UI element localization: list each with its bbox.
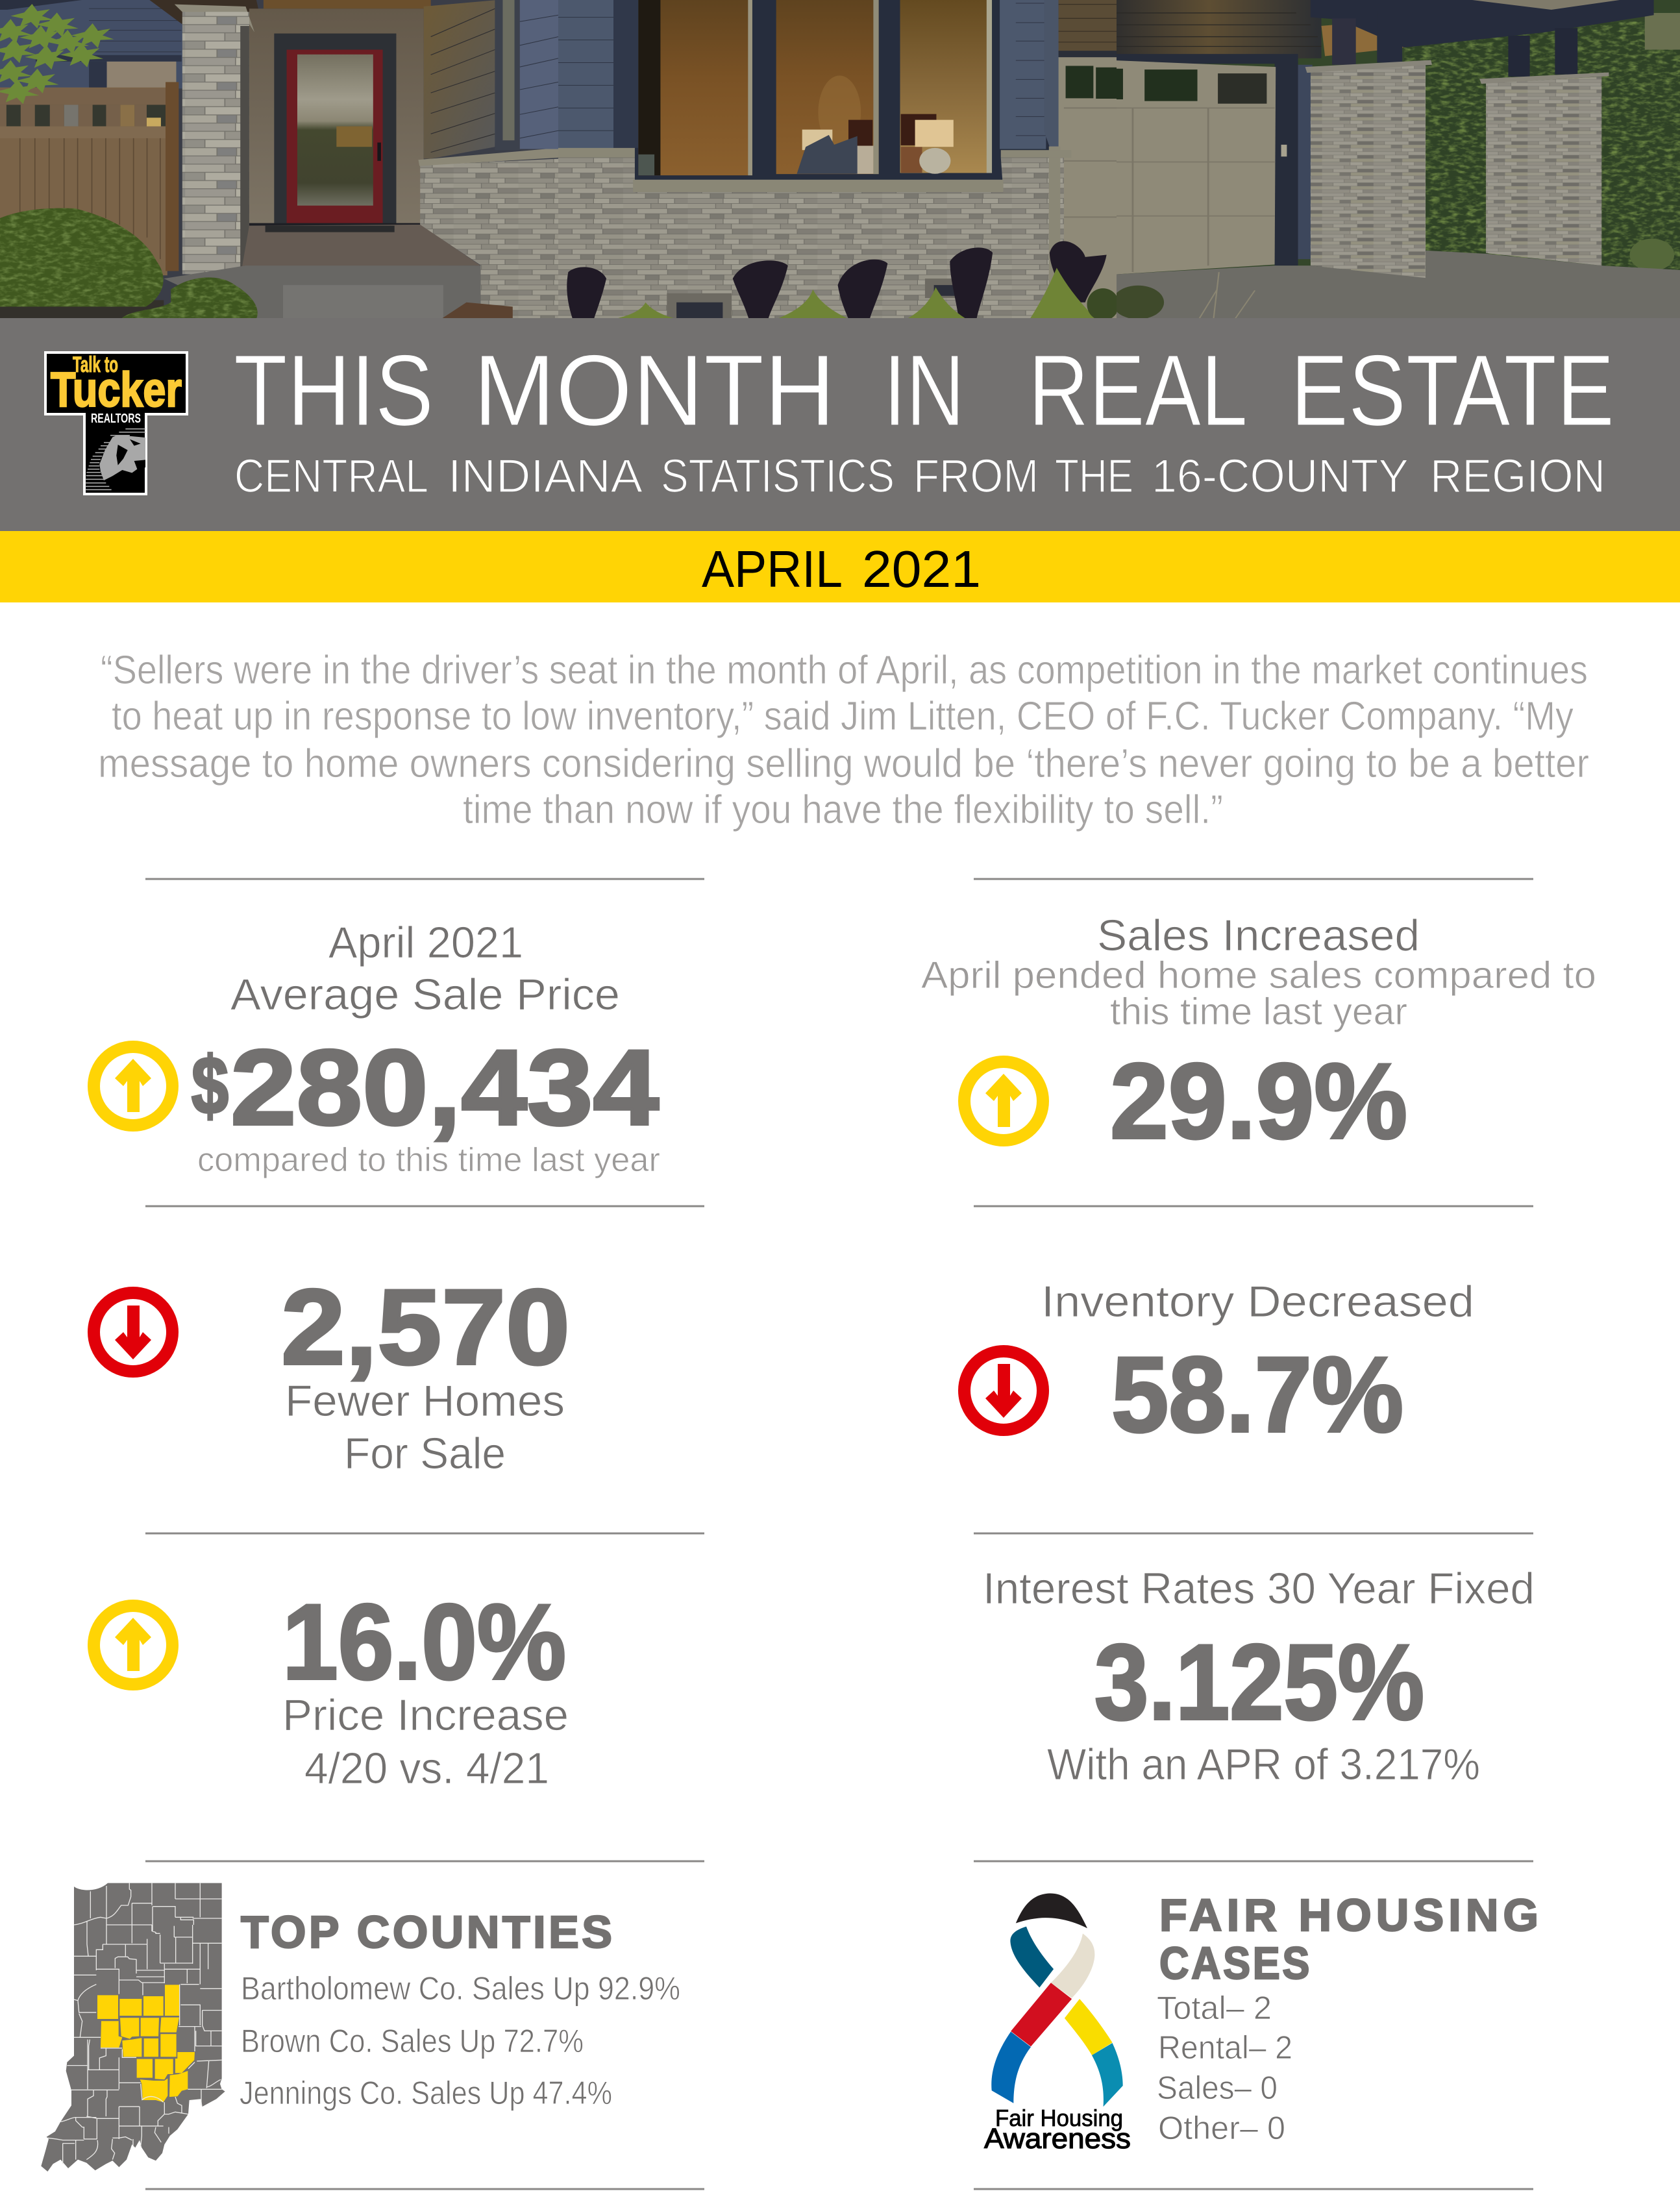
panel: fair housing cases: FAIR HOUSING bbox=[1159, 1890, 1538, 1940]
date banner: APRIL bbox=[702, 540, 843, 598]
header band bbox=[0, 318, 1680, 531]
panel: fewer homes: For Sale bbox=[344, 1429, 506, 1478]
panel: sales increased: April pended home sales compared to bbox=[921, 954, 1596, 996]
panel: average sale price: compared to this time last year bbox=[197, 1141, 660, 1179]
price value: $ bbox=[191, 1041, 229, 1131]
title: MONTH bbox=[473, 334, 835, 447]
title bbox=[234, 334, 1614, 447]
panel: sales increased: Sales Increased bbox=[1097, 911, 1420, 960]
panel: fair housing cases: Fair Housing bbox=[995, 2105, 1123, 2131]
title: THIS bbox=[234, 334, 434, 447]
panel: inventory decreased: Inventory Decreased bbox=[1041, 1277, 1474, 1326]
icon: up arrow bbox=[93, 1606, 173, 1684]
panel: fair housing cases: Sales– 0 bbox=[1157, 2070, 1278, 2106]
panel: interest rates bbox=[983, 1564, 1535, 1789]
panel: price increase: 16.0% bbox=[282, 1582, 566, 1702]
icon: down arrow bbox=[93, 1293, 173, 1371]
panel: interest rates: Interest Rates 30 Year Fixed bbox=[983, 1564, 1535, 1613]
panel: price increase: Price Increase bbox=[282, 1690, 569, 1740]
panel: inventory decreased: 58.7% bbox=[1111, 1335, 1403, 1454]
panel: average sale price: April 2021 bbox=[328, 918, 523, 967]
photo section: bay window and stone wall bbox=[558, 0, 1117, 318]
price value: 280,434 bbox=[230, 1028, 659, 1147]
map: Indiana counties bbox=[41, 1883, 225, 2172]
panel: sales increased: this time last year bbox=[1110, 991, 1407, 1033]
subtitle: CENTRAL bbox=[234, 451, 428, 502]
photo section: garage door, stone pillars and garden bbox=[1117, 0, 1680, 318]
subtitle: STATISTICS bbox=[661, 451, 895, 502]
panel: fair housing cases: Awareness bbox=[984, 2123, 1131, 2155]
subtitle: INDIANA bbox=[448, 451, 643, 502]
hero photo: house exterior bbox=[0, 0, 1680, 321]
subtitle: REGION bbox=[1430, 451, 1605, 502]
panel: price increase bbox=[93, 1582, 569, 1793]
panel: average sale price bbox=[93, 918, 660, 1179]
panel: fair housing cases: CASES bbox=[1159, 1938, 1312, 1988]
icon: up arrow bbox=[93, 1046, 173, 1126]
photo section: fence, column, red door and porch bbox=[0, 0, 558, 318]
panel: top counties: Jennings Co. Sales Up 47.4% bbox=[240, 2075, 612, 2111]
subtitle: 16-COUNTY bbox=[1152, 451, 1409, 502]
logo: Talk to Tucker Realtors: Tucker bbox=[51, 362, 182, 417]
icon: down arrow bbox=[965, 1352, 1043, 1430]
logo: Talk to Tucker Realtors: REALTORS bbox=[91, 412, 141, 426]
quote bbox=[98, 648, 1589, 832]
panel: top counties: Brown Co. Sales Up 72.7% bbox=[241, 2023, 584, 2059]
title: IN bbox=[883, 334, 965, 447]
panel: fewer homes bbox=[93, 1267, 570, 1478]
panel: inventory decreased bbox=[965, 1277, 1474, 1454]
panel: fair housing cases: Rental– 2 bbox=[1158, 2029, 1292, 2066]
panel: top counties: Bartholomew Co. Sales Up 92.9% bbox=[241, 1970, 680, 2007]
subtitle: THE bbox=[1055, 451, 1133, 502]
panel: price increase: 4/20 vs. 4/21 bbox=[304, 1744, 549, 1793]
panel: interest rates: 3.125% bbox=[1094, 1622, 1424, 1742]
panel: interest rates: With an APR of 3.217% bbox=[1047, 1740, 1480, 1789]
panel: sales increased: 29.9% bbox=[1110, 1041, 1407, 1161]
icon: fair housing ribbon bbox=[991, 1894, 1123, 2107]
logo: Talk to Tucker Realtors: Talk to bbox=[73, 353, 118, 377]
subtitle: FROM bbox=[913, 451, 1039, 502]
panel: sales increased bbox=[921, 911, 1596, 1161]
panel: fair housing cases bbox=[984, 1890, 1538, 2155]
date banner: 2021 bbox=[862, 540, 981, 598]
icon: up arrow bbox=[965, 1062, 1043, 1140]
panel: top counties: TOP COUNTIES bbox=[241, 1907, 612, 1957]
date banner bbox=[0, 531, 1680, 602]
panel: average sale price: Average Sale Price bbox=[230, 970, 620, 1019]
logo: Talk to Tucker Realtors bbox=[44, 351, 188, 495]
subtitle bbox=[234, 451, 1605, 502]
quote: message to home owners considering selling would be ‘there’s never going to be a better bbox=[98, 741, 1589, 786]
panel: fair housing cases: Total– 2 bbox=[1157, 1990, 1272, 2026]
title: REAL bbox=[1028, 334, 1248, 447]
title: ESTATE bbox=[1291, 334, 1614, 447]
panel: top counties bbox=[41, 1883, 680, 2172]
panel: fair housing cases: Other– 0 bbox=[1158, 2110, 1285, 2146]
panel: fewer homes: 2,570 bbox=[281, 1267, 570, 1387]
panel: fewer homes: Fewer Homes bbox=[285, 1376, 565, 1426]
quote: time than now if you have the flexibility to sell.” bbox=[463, 787, 1223, 832]
